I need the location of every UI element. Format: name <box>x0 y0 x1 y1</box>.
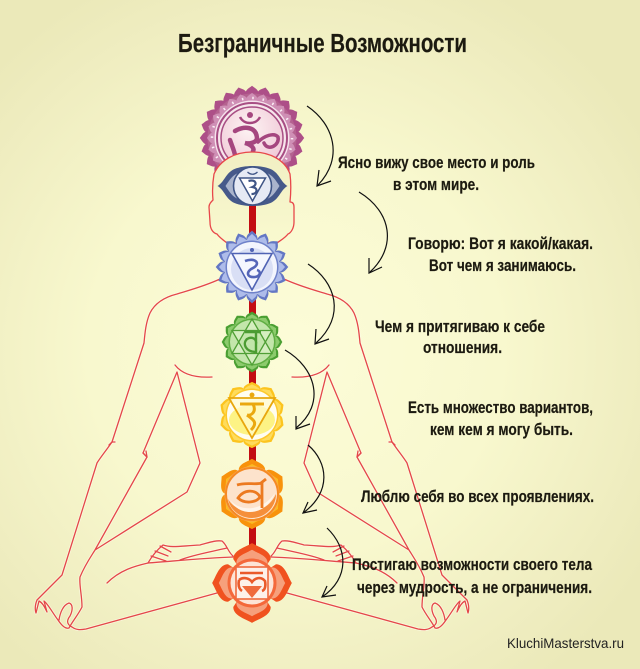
arrow 4 <box>285 350 314 429</box>
arrow 5 <box>303 445 324 513</box>
body outline <box>35 152 469 630</box>
text block 4: Есть множество вариантов, <box>408 399 593 417</box>
chakra: throat <box>216 231 288 303</box>
figure right side halo <box>271 279 469 630</box>
chakra: third eye <box>218 166 288 206</box>
chakra: heart <box>222 312 282 372</box>
spine <box>249 200 256 565</box>
text block 3: отношения. <box>423 339 502 357</box>
text block 3 <box>375 318 545 357</box>
chakra: solar plexus <box>218 382 286 448</box>
text block 4 <box>408 399 593 439</box>
text block 2 <box>408 235 593 275</box>
text block 6: Постигаю возможности своего тела <box>352 556 593 574</box>
text block 2: Говорю: Вот я какой/какая. <box>408 235 593 253</box>
chakra: crown <box>200 86 304 190</box>
text block 2: Вот чем я занимаюсь. <box>429 257 576 275</box>
site credit: KluchiMasterstva.ru <box>507 635 624 651</box>
text block 4: кем кем я могу быть. <box>430 421 573 439</box>
text block 1: Ясно вижу свое место и роль <box>338 154 535 172</box>
chakra: root <box>212 543 292 623</box>
text block 6 <box>352 556 593 597</box>
text block 5: Люблю себя во всех проявлениях. <box>361 488 594 506</box>
text block 6: через мудрость, а не ограничения. <box>357 579 592 597</box>
figure head <box>209 152 294 243</box>
chakra: sacral <box>215 459 289 529</box>
text block 3: Чем я притягиваю к себе <box>375 318 545 336</box>
arrow 1 <box>307 106 333 186</box>
text block 1 <box>338 154 535 194</box>
arrow 3 <box>308 264 334 344</box>
figure right side line <box>271 279 469 630</box>
figure left side halo <box>35 279 233 630</box>
arrow 2 <box>359 192 387 273</box>
text block 1: в этом мире. <box>393 176 479 194</box>
figure left side line <box>35 279 233 630</box>
spine overlay <box>249 204 256 234</box>
arrow 6 <box>322 528 343 597</box>
title: Безграничные Возможности <box>178 30 467 58</box>
